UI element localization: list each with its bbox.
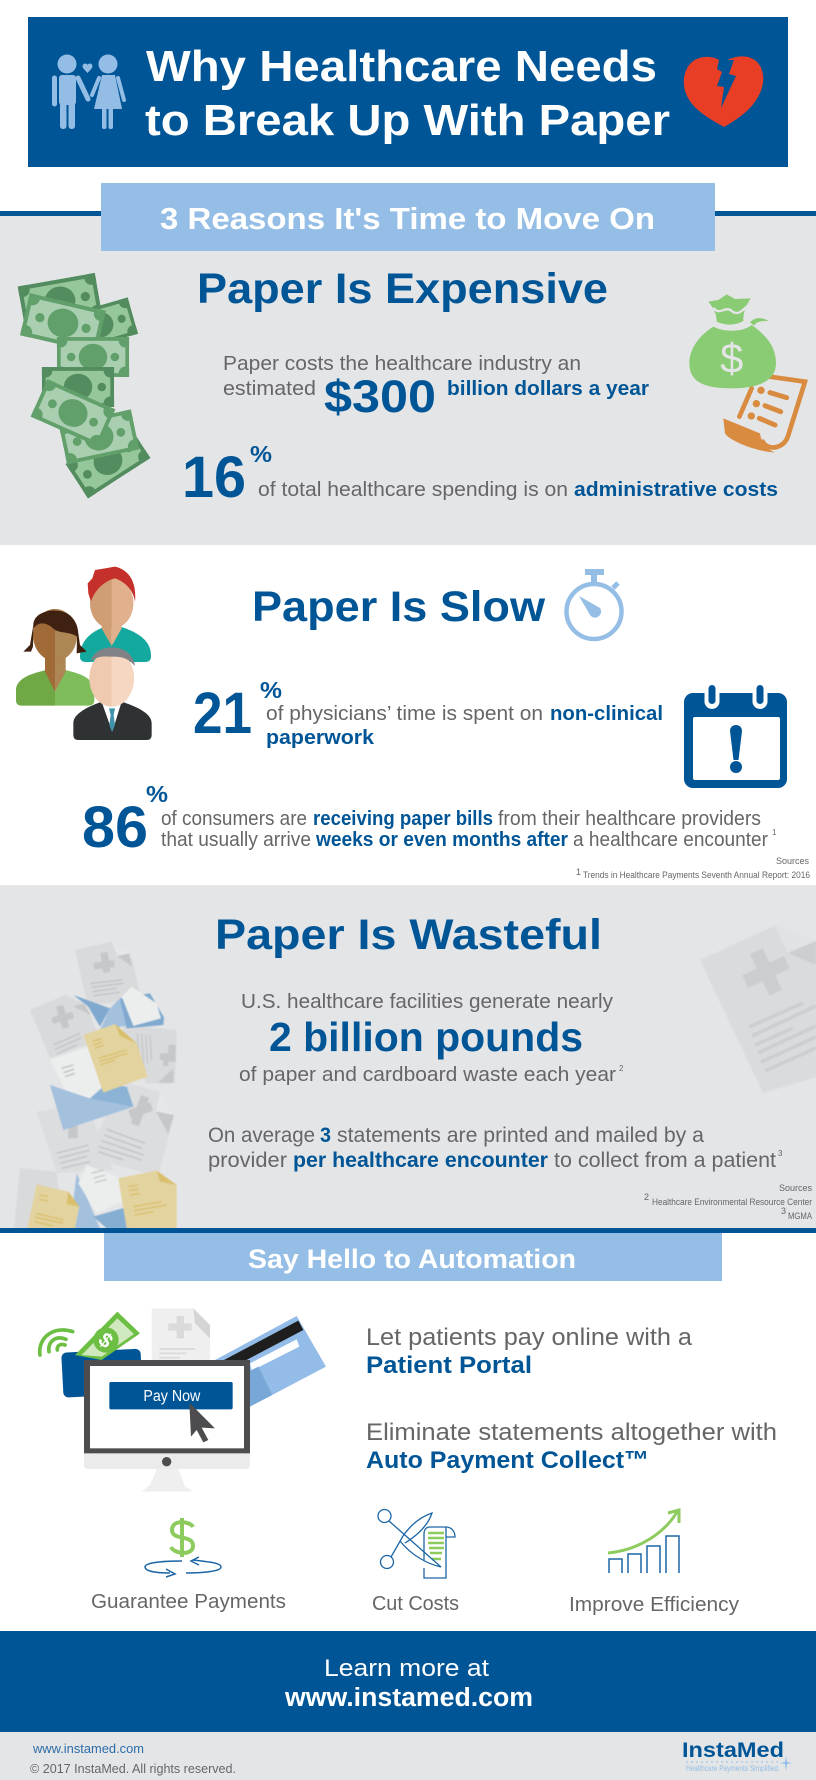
text: 3 statements per encounter: statements are printed and mailed by a [337, 1124, 704, 1147]
sources: paper is slow: Sources [776, 856, 809, 866]
text: 3 statements per encounter: 3 [778, 1149, 783, 1158]
footer url: www.instamed.com [32, 1741, 144, 1756]
sources: paper is slow [576, 856, 810, 880]
icon: money bag and receipt [689, 294, 805, 452]
title: Why Healthcare Needs [146, 42, 657, 91]
text: 3 statements per encounter: On average [208, 1124, 315, 1147]
icon: rising bar chart with arrow [608, 1510, 679, 1573]
stat: 86 percent: % [146, 781, 168, 807]
panel: learn more call to action: www.instamed.com [284, 1684, 533, 1712]
section banner: 3 reasons: 3 Reasons It's Time to Move On [160, 201, 655, 236]
sources: paper is wasteful: 2 [644, 1192, 649, 1202]
text: 300 billion dollars: estimated [223, 377, 316, 400]
icon: calendar with exclamation [684, 685, 787, 788]
stat: 86 percent: a healthcare encounter [573, 829, 768, 851]
benefit: improve efficiency [569, 1510, 740, 1616]
section banner: say hello to automation [104, 1233, 722, 1281]
illustration: pay now computer with wallet, bill, document and card: $ [94, 1328, 118, 1353]
stat: 86 percent: that usually arrive [161, 829, 311, 851]
panel: paper is expensive [0, 183, 816, 545]
text: 2 billion pounds: 2 billion pounds [269, 1014, 583, 1060]
text: patient portal: Let patients pay online with a [366, 1324, 692, 1351]
section banner: 3 reasons [101, 183, 715, 251]
section banner: say hello to automation: Say Hello to Automation [248, 1244, 576, 1274]
stat: 21 percent: non-clinical [550, 702, 663, 725]
text: auto payment collect: Auto Payment Collect™ [366, 1447, 649, 1474]
text: 3 statements per encounter: to collect from a patient [554, 1149, 776, 1172]
text: patient portal [366, 1324, 692, 1379]
text: 300 billion dollars: $300 [324, 371, 436, 422]
illustration: pile of documents and envelopes [14, 942, 177, 1228]
stat: 16 percent: administrative costs [574, 478, 778, 501]
text: 300 billion dollars: Paper costs the healthcare industry an [223, 352, 581, 375]
icon: broken heart [684, 56, 763, 127]
logo: InstaMed: InstaMed [682, 1739, 784, 1762]
stat: 16 percent: % [250, 441, 272, 467]
stat: 16 percent: 16 [182, 445, 246, 510]
icon: three people [16, 567, 152, 740]
panel: say hello to automation [0, 1228, 816, 1616]
title [145, 42, 670, 145]
panel: footer [0, 1732, 816, 1780]
stat: 21 percent: paperwork [266, 726, 375, 749]
stat: 16 percent [182, 441, 778, 510]
stat: 86 percent: weeks or even months after [315, 829, 568, 851]
text: 300 billion dollars: billion dollars a year [447, 377, 649, 400]
icon: stack of dollar bills [14, 269, 155, 503]
text: 2 billion pounds: of paper and cardboard waste each year [239, 1063, 616, 1086]
text: auto payment collect [366, 1419, 777, 1474]
icon: money bag and receipt: $ [720, 334, 743, 381]
illustration: pay now computer with wallet, bill, document and card [40, 1308, 326, 1492]
benefit: cut costs: Cut Costs [372, 1592, 459, 1615]
text: 3 statements per encounter: 3 [320, 1124, 331, 1147]
benefit: guarantee payments [91, 1518, 286, 1613]
sources: paper is wasteful: Sources [779, 1183, 812, 1193]
stat: 86 percent: receiving paper bills [313, 808, 493, 830]
copyright: © 2017 InstaMed. All rights reserved. [30, 1761, 236, 1776]
icon: dollar with circular arrows [145, 1518, 221, 1577]
text: 3 statements per encounter [208, 1124, 783, 1172]
stat: 21 percent: 21 [193, 681, 252, 746]
benefit: improve efficiency: Improve Efficiency [569, 1593, 740, 1616]
text: 2 billion pounds: 2 [619, 1064, 624, 1073]
illustration: pay now computer with wallet, bill, document and card: Pay Now [143, 1388, 201, 1405]
panel: header banner [28, 17, 788, 167]
panel: learn more call to action: Learn more at [324, 1655, 489, 1682]
text: 3 statements per encounter: provider [208, 1149, 287, 1172]
illustration: faded document, right [700, 925, 816, 1093]
text: 300 billion dollars [223, 352, 649, 422]
stat: 86 percent [82, 781, 777, 860]
stat: 86 percent: from their healthcare providers [498, 808, 761, 830]
text: patient portal: Patient Portal [366, 1352, 532, 1379]
heading: paper is slow: Paper Is Slow [252, 583, 546, 631]
icon: stopwatch [566, 569, 622, 639]
text: auto payment collect: Eliminate statements altogether with [366, 1419, 777, 1446]
benefit: cut costs [372, 1510, 459, 1615]
benefit: guarantee payments: Guarantee Payments [91, 1590, 286, 1613]
stat: 21 percent: % [260, 677, 282, 703]
panel: paper is wasteful [0, 885, 816, 1228]
stat: 86 percent: of consumers are [161, 808, 307, 830]
icon: couple holding hands [54, 54, 124, 129]
text: 2 billion pounds: U.S. healthcare facilities generate nearly [241, 990, 614, 1013]
icon: scissors cutting a receipt [378, 1510, 455, 1578]
logo: InstaMed: Healthcare Payments Simplified [686, 1764, 778, 1773]
logo: InstaMed [682, 1739, 792, 1773]
sources: paper is wasteful: 3 [781, 1206, 786, 1216]
stat: 86 percent: 86 [82, 795, 148, 860]
stat: 86 percent: 1 [772, 828, 777, 837]
sources: paper is wasteful: MGMA [788, 1211, 812, 1221]
text: 2 billion pounds [239, 990, 624, 1086]
panel: paper is slow [0, 545, 816, 885]
heading: paper is wasteful: Paper Is Wasteful [215, 911, 602, 959]
stat: 21 percent [193, 677, 663, 749]
panel: learn more call to action [0, 1631, 816, 1732]
sources: paper is wasteful [644, 1183, 812, 1221]
stat: 21 percent: of physicians’ time is spent on [266, 702, 543, 725]
title: to Break Up With Paper [145, 96, 670, 145]
sources: paper is slow: 1 [576, 867, 581, 877]
stat: 16 percent: of total healthcare spending is on [258, 478, 568, 501]
text: 3 statements per encounter: per healthcare encounter [293, 1149, 548, 1172]
heading: paper is expensive: Paper Is Expensive [197, 265, 608, 313]
